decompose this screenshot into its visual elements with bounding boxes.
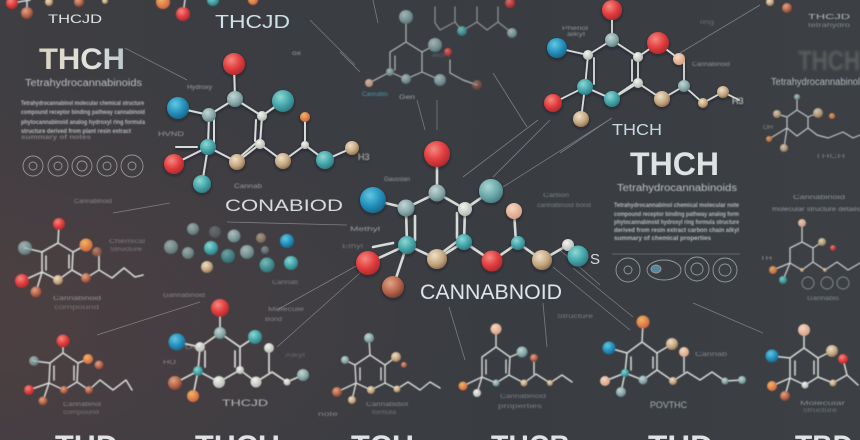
small labels: upper right: alkyl <box>567 32 585 38</box>
small labels: upper right: tetrahydro <box>808 23 851 29</box>
small labels: upper left: Cannab <box>234 184 263 190</box>
icons and labels: Gannabis <box>807 296 839 302</box>
small labels: upper right: Cannabinoid <box>692 62 730 68</box>
atoms <box>356 141 588 298</box>
panel: far right notes: molecular structure details <box>772 207 860 213</box>
small labels: lower section: compound <box>54 305 99 311</box>
label: Gen <box>399 95 415 101</box>
heading: THCH: THCH <box>39 43 125 76</box>
molecule: lower centre D <box>332 333 440 404</box>
paragraph: derived from resin extract carbon chain alkyl <box>614 227 739 234</box>
small labels: upper left: Carbon <box>543 193 569 199</box>
small labels: upper left: HVND <box>158 132 185 138</box>
paragraph: phytocannabinoid analog hydroxyl ring formula <box>21 119 145 126</box>
molecule: main central cannabinoid <box>356 141 600 298</box>
panel: left THCH description <box>21 43 145 205</box>
caption: Cannabinoid <box>74 199 112 205</box>
label: Cannabis <box>362 92 388 98</box>
molecule: lower left A <box>15 218 143 298</box>
small labels: lower section: Chemical <box>109 239 145 245</box>
heading: CONABIOD: CONABIOD <box>225 196 343 215</box>
label: POVTHC: POVTHC <box>650 400 687 410</box>
small labels: upper left: cannabinoid bond <box>537 203 591 209</box>
panel: far right notes: OH <box>763 125 773 131</box>
paragraph: phytocannabinoid hydroxyl ring formula structure <box>614 219 739 226</box>
panel: far right notes: Cannabinoid <box>793 195 845 201</box>
molecule: lower right G <box>766 324 858 401</box>
small labels: upper right: Phenol <box>562 26 588 32</box>
subtitle: Tetrahydrocannabinoids <box>617 183 737 194</box>
molecule: upper right <box>544 0 744 127</box>
paragraph: summary of notes <box>21 134 91 141</box>
small labels: lower section: compound <box>63 410 99 416</box>
icon row <box>616 257 737 282</box>
panel: far right notes: THCH <box>815 154 845 160</box>
small labels: lower section: note <box>318 412 339 418</box>
molecule: right middle small <box>760 219 860 302</box>
small labels: lower section: Structure <box>110 247 143 253</box>
small labels: upper left: Ethyl <box>342 244 363 250</box>
small labels: upper right <box>562 14 851 68</box>
bottom row cropped headings <box>55 430 853 440</box>
small labels: upper left <box>158 51 591 250</box>
title: THCJD small: THCJD <box>48 12 102 26</box>
bonds <box>368 154 578 287</box>
small labels: upper left: Methyl <box>350 227 380 233</box>
small labels: upper left: ox <box>292 51 301 57</box>
panel: central THCH description <box>614 146 739 282</box>
heading: THCH small: THCH <box>612 122 662 139</box>
molecule: top centre <box>362 0 517 101</box>
heading: CANNABNOID: CANNABNOID <box>420 281 562 304</box>
label: THCJD lower: THCJD <box>222 398 269 408</box>
paragraph: Tetrahydrocannabinol molecular chemical structure <box>21 100 144 107</box>
small labels: lower section: Cannabinoid <box>500 394 546 400</box>
molecule: lower right F <box>600 316 746 397</box>
label: H3 <box>732 96 744 106</box>
label: S <box>590 251 600 268</box>
paragraph <box>21 100 145 141</box>
icons and labels: TH <box>760 256 772 262</box>
small labels: lower section: Gannabinoid <box>163 293 205 299</box>
molecule: lower centre-left C <box>168 299 309 402</box>
atom cluster <box>164 223 299 286</box>
paragraph: Tetrahydrocannabinol chemical molecular note <box>614 202 739 209</box>
small labels: lower section: formula <box>372 410 397 416</box>
molecule: lower centre E <box>458 324 572 397</box>
top strip partial molecules <box>6 0 792 21</box>
small labels: upper left: atom <box>432 53 450 59</box>
divider <box>612 253 740 255</box>
small labels: lower section: Molecule <box>268 307 305 313</box>
small labels: lower section: Cannabinoid <box>53 296 101 302</box>
small labels: lower section: Molecular <box>800 401 845 407</box>
small labels: lower section: Bond <box>265 317 282 323</box>
small labels: lower section: properties <box>498 404 542 410</box>
label: H3 <box>358 152 370 162</box>
icons and labels <box>760 256 849 302</box>
small labels: lower section: Cannabinol <box>63 402 101 408</box>
small labels: lower section: Alkyl <box>285 353 305 359</box>
molecule: upper left <box>164 53 370 193</box>
connector lines <box>97 0 763 360</box>
small labels: lower section: Cannab <box>695 352 728 358</box>
small labels: upper left: Hydroxy <box>187 85 212 91</box>
small labels: lower section: HO <box>163 360 176 366</box>
paragraph: summary of chemical properties <box>614 235 711 242</box>
molecule: lower left B <box>24 334 132 406</box>
molecule: right upper small <box>766 94 860 152</box>
paragraph: structure derived from plant resin extract <box>21 128 132 135</box>
small labels: lower section: Oxy <box>185 345 202 351</box>
small labels: lower section: Cannabidiol <box>366 402 408 408</box>
paragraph: compound receptor binding pathway analog form <box>614 211 739 218</box>
heading: THCH: THCH <box>630 146 719 182</box>
small labels: lower section: structure <box>803 408 838 414</box>
small labels: lower section <box>53 239 845 418</box>
subtitle: Tetrahydrocannabinoids <box>25 78 142 89</box>
small labels: lower section: Structure <box>557 314 594 320</box>
paragraph <box>614 202 739 242</box>
panel: far right notes <box>763 45 860 213</box>
title: THCJD large: THCJD <box>215 12 290 32</box>
small labels: upper right: THCJD <box>808 14 850 21</box>
paragraph: compound receptor binding pathway cannabinoid <box>21 109 145 116</box>
small labels: upper right: ring <box>700 20 714 26</box>
small labels: upper left: Gaussian <box>384 177 410 183</box>
icon row <box>23 155 143 177</box>
label: Cannab <box>272 280 299 286</box>
